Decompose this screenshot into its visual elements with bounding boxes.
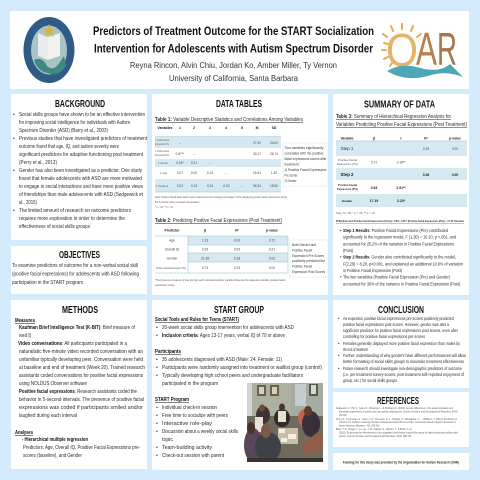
- table 1: correlations: 3: [209, 126, 211, 130]
- table 2: regression: 1.13: [202, 238, 208, 242]
- text block: participants: participated in the program: [162, 381, 218, 387]
- table 1: correlations: 0.62*: [176, 161, 184, 165]
- text block: background bullets: Gender has also been investigated as a predictor. One study: [19, 168, 142, 174]
- text block: conclusion bullets: •: [338, 353, 340, 358]
- callout: table 2: positively predicted the: [292, 259, 325, 263]
- table 2: regression: Positive Facial Expression (Pre): [156, 267, 186, 270]
- table 3: regression summary: Variable: [340, 136, 354, 140]
- text block: participants: Participants: [155, 349, 181, 355]
- callout: table 1: facial expressions scores after: [284, 157, 327, 161]
- text block: step results: F(2,29) = 8.20, p<0.001, and explained an additional 10.9% of variation: [343, 261, 464, 266]
- table 3: regression summary: 0.00: [452, 147, 458, 151]
- text block: background bullets: •: [13, 136, 15, 142]
- text block: start program: Team-building activity: [162, 445, 212, 451]
- text block: conclusion bullets: [338, 316, 467, 383]
- text block: measures: Measures: [15, 318, 35, 324]
- text block: references: Autism Spectrum Disorders, 7(5), 592-603.: [339, 424, 380, 428]
- table 3: regression summary: 0.63: [371, 186, 377, 190]
- text block: program description: [155, 317, 294, 339]
- text block: background bullets: Previous studies that have investigated predictors of treatment: [19, 136, 147, 142]
- text block: conclusion bullets: better formatting of social skills groups to maximize treatment effectiveness: [343, 359, 464, 364]
- panel: conclusion: [333, 300, 469, 388]
- text block: references: 1297-1306.: [339, 414, 347, 417]
- panel: funding: [333, 453, 469, 470]
- text block: participants: [155, 349, 322, 387]
- table 1: correlations: 0.24: [207, 184, 213, 188]
- text block: step results: The two variables (Positive Facial Expression (Pre) and Gender): [343, 275, 451, 280]
- text block: measures: naturalistic five-minute video recorded conversation with an: [19, 349, 143, 355]
- text block: references: [336, 407, 459, 438]
- icon: OAR logo: R: [437, 23, 457, 75]
- panel: objectives: [11, 246, 147, 294]
- text block: background bullets: Social skills groups have shown to be an effective intervention: [19, 112, 145, 118]
- callout: table 2: Expression Post Scores: [292, 270, 325, 274]
- icon: OAR logo: O: [386, 24, 418, 76]
- text block: step results: accounted for 25.2% of the variation in Positive Facial Expressions: [343, 241, 454, 246]
- callout: table 2: Both Gender and: [292, 243, 316, 247]
- text block: references: friendship experiences of autistic and non-autistic adolescents. Journal of Autism and Developmental Disorders, 46(4),: [339, 410, 458, 414]
- table 3: regression summary: Expression (Pre): [337, 187, 358, 191]
- text block: conclusion bullets: •: [338, 341, 340, 346]
- table 1: correlations: --: [225, 171, 227, 175]
- table 1: correlations: 27.30: [253, 141, 261, 145]
- table 3: regression summary: 0.00: [452, 173, 458, 177]
- text block: analyses: Predictors: Age, Overall IQ, Positive Facial Expressions pre-: [23, 445, 140, 451]
- text block: step results: Step 1 Results: Positive Facial Expressions (Pre) contributed: [343, 228, 449, 233]
- table 1: correlations: SD: [272, 126, 277, 130]
- table 1: correlations: 1.30: [271, 171, 277, 175]
- text block: conclusion bullets: the end of treatment: [343, 347, 369, 352]
- text block: participants: •: [156, 373, 158, 379]
- authors: Reyna Rincon, Alvin Chiu, Jordan Ko, Amber Miller, Ty Vernon: [130, 61, 337, 70]
- callout: table 1: treatment:: [284, 162, 300, 166]
- text block: background bullets: al., 2015): [19, 200, 37, 206]
- text block: conclusion bullets: •: [338, 366, 340, 371]
- text block: references: outcome for children receiving intensive behavioral intervention in a large, community-based program. Research in: [339, 421, 457, 424]
- table 2: regression: 0.00: [234, 238, 240, 242]
- callout: table 2: [290, 240, 328, 277]
- text block: conclusion bullets: controlling for positive facial expressions pre scores: [343, 334, 425, 339]
- panel: summary of data: [333, 94, 469, 295]
- table 2: regression: p-value: [266, 228, 278, 232]
- text block: analyses: - Hierarchical multiple regression: [22, 437, 88, 443]
- text block: background bullets: •: [13, 168, 15, 174]
- text block: measures: at baseline and end of treatment (Week 20). Trained research: [19, 365, 145, 371]
- table 1: correlations: 1. Positive Facial: [155, 139, 169, 142]
- heading: objectives: OBJECTIVES: [59, 250, 100, 261]
- heading: methods: METHODS: [62, 305, 98, 316]
- table 1: correlations: 0.00: [191, 171, 197, 175]
- heading: start group: START GROUP: [214, 305, 264, 316]
- text block: participants: •: [156, 365, 158, 371]
- table 3: regression summary: t: [400, 136, 402, 140]
- panel: data tables: [152, 94, 328, 295]
- text block: conclusion bullets: Females generally displayed more positive facial expression than males by: [343, 341, 461, 346]
- text block: measures: expressions was coded if participants smiled and/or: [19, 405, 143, 411]
- table 2 title: Table 2: Predicting Positive Facial Expressions (Post Treatment): [155, 218, 282, 224]
- callout: table 1: 1) Positive Facial Expressions: [284, 168, 327, 172]
- table 1: correlations: 5. Overall IQ: [156, 185, 168, 188]
- text block: measures: unfamiliar typically developing peer. Conversation were held: [19, 357, 143, 363]
- table 3: regression summary: Gender: [342, 199, 353, 203]
- table 3: regression summary: Step 1: [341, 146, 354, 151]
- text block: step results: •: [340, 255, 342, 260]
- text block: start program: Discussion about a weekly social skills: [162, 429, 238, 435]
- table 2: regression: [155, 228, 288, 273]
- text block: analyses: scores (baseline), and Gender: [23, 453, 82, 459]
- text block: measures: Kaufman Brief Intelligence Test (K-BIT): Brief measure of: [19, 325, 135, 331]
- icon: OAR logo: [382, 23, 463, 78]
- table 1: correlations: [155, 126, 281, 192]
- text block: start program: topic: [162, 437, 173, 443]
- text block: analyses: [15, 430, 140, 459]
- text block: background bullets: found that female adolescents with ASD are more motivated: [19, 176, 142, 182]
- text block: measures: Video conversations: All participants participated in a: [18, 341, 127, 347]
- table 1: correlations: --: [193, 152, 195, 156]
- text block: participants: Participants were randomly assigned into treatment or waitlist group (control): [162, 365, 322, 371]
- text block: start program: Free time to socialize with peers: [162, 413, 228, 419]
- table 1: correlations: --: [209, 161, 211, 165]
- text block: program description: 20-week social skills group intervention for adolescents with ASD: [162, 325, 294, 331]
- text block: start program: [155, 397, 238, 459]
- panel: methods: [11, 300, 147, 469]
- heading: background: BACKGROUND: [55, 99, 105, 110]
- panel: references: [333, 392, 469, 447]
- heading: references: REFERENCES: [377, 396, 419, 407]
- text block: background bullets: (Perry et al., 2013): [19, 160, 57, 166]
- table 2: regression: 0.18: [234, 256, 240, 260]
- text block: background bullets: Spectrum Disorder (ASD) (Barry et al., 2003): [19, 128, 108, 134]
- text block: step results: [340, 228, 464, 286]
- text block: references: Barry, T. D., Klinger, L. G., Lee, J. M., Palardy, N., Gilmore, T., & Bodin, S. D.: [336, 428, 412, 431]
- table 1: correlations: 0.87**: [176, 152, 185, 156]
- text block: measures: [15, 318, 145, 419]
- table 3: regression summary: [336, 136, 467, 207]
- panel: background: [11, 94, 147, 240]
- callout: table 1: Pre Scores: [284, 174, 298, 178]
- table 2 note: *The β-beta is a measure of how strongly each individual predictor variable influences the dependent variable (positive facial: [155, 279, 285, 282]
- callout: table 1: [283, 143, 328, 186]
- icon: OAR logo: A: [416, 23, 437, 75]
- table 1: correlations: M: [256, 126, 259, 130]
- text block: step results: in Positive Facial Expression (Post): [343, 268, 403, 273]
- text block: references: Perry, A., Cummings, A., Geier, J. D., Freeman, N. L., Hughes, S., Managhan, T., ... Williams, J. (2013). Predictors of: [336, 418, 457, 421]
- table 3: regression summary: 0.25: [423, 147, 429, 151]
- text block: background bullets: effectiveness of social skills groups: [19, 224, 90, 230]
- panel: start group: [152, 300, 328, 470]
- table 2: regression: 0.23: [234, 266, 240, 270]
- text block: step results: significantly to the regression model, F (1,30) = 10.10, p <.001, and: [343, 235, 457, 240]
- table 3: regression summary: 2.23*: [397, 199, 406, 203]
- text block: conclusion bullets: group, etc.) for social skills groups: [343, 378, 397, 383]
- text block: program description: •: [156, 325, 158, 331]
- header banner: [10, 11, 469, 89]
- text block: start program: •: [156, 413, 158, 419]
- text block: step results: •: [340, 228, 342, 233]
- heading: conclusion: CONCLUSION: [378, 305, 424, 316]
- table 2: regression: 0.72: [269, 238, 275, 242]
- table 1: correlations: 0.22: [177, 184, 183, 188]
- table 1: correlations: 2: [193, 126, 195, 130]
- text block: start program: •: [156, 453, 158, 459]
- table 1: correlations: 15.51: [253, 171, 261, 175]
- text block: conclusion bullets: (i.e. pre treatment survey scores, post treatment self-reported enjoyment of: [343, 372, 465, 377]
- table 2: regression: 0.73: [202, 266, 208, 270]
- table 1: correlations: 2. Positive Facial: [155, 150, 169, 153]
- text block: conclusion bullets: significant predictor for positive facial expressions post scores, even after: [343, 328, 459, 333]
- table 2: regression: 0.00: [234, 248, 240, 252]
- affiliation: University of California, Santa Barbara: [169, 74, 299, 83]
- table 1: correlations: 0.13: [191, 184, 197, 188]
- table 1: correlations: -0.03: [222, 184, 230, 188]
- text block: conclusion bullets: positive facial expressions post scores. However, gender was also a: [343, 322, 450, 327]
- text block: participants: •: [156, 357, 158, 363]
- table 3 title: Table 3: Summary of Hierarchical Regression Analysis for: [336, 114, 451, 120]
- text block: objectives: To examine predictors of outcome for a non-verbal social skill: [12, 263, 138, 269]
- callout: table 1: correlated with the positive: [284, 152, 324, 156]
- text block: start program: START Program: [155, 397, 189, 403]
- text block: start program: Individual check-in session: [162, 405, 217, 411]
- table 2: regression: R²: [235, 228, 240, 232]
- text block: start program: •: [156, 445, 158, 451]
- callout: table 2: Positive Facial: [292, 248, 312, 252]
- table 1: correlations: 24.02: [270, 141, 278, 145]
- table 3: regression summary: Positive Facial: [338, 183, 357, 187]
- text block: background bullets: •: [13, 112, 15, 118]
- text block: start program: •: [156, 429, 158, 435]
- table 2: regression: Age: [169, 238, 175, 242]
- table 1: correlations: 96.34: [253, 184, 261, 188]
- text block: conclusion bullets: As expected, positive facial expressions pre scores positively predicted: [343, 316, 455, 321]
- text block: program description: •: [156, 333, 158, 339]
- text block: objectives: participation in the START program: [12, 280, 83, 286]
- table 2: regression: β: [204, 228, 206, 232]
- table 3: regression summary: 3.18**: [397, 160, 406, 164]
- text block: background bullets: [13, 112, 147, 230]
- text block: background bullets: The limited amount of research on outcome predictors: [19, 208, 131, 214]
- text block: participants: 35 adolescents diagnosed with ASD (Male: 24, Female: 11): [162, 357, 282, 363]
- text block: measures: behavior in 5-second intervals. The presence of positive facial: [19, 397, 144, 403]
- table 1 title: Table 1: Variable Descriptive Statistics and Correlations Among Variables: [155, 117, 303, 123]
- text block: start program: •: [156, 421, 158, 427]
- text block: measures: using NOLDUS Observer software: [19, 381, 87, 387]
- table 3: regression summary: 0.36: [423, 173, 429, 177]
- callout: table 1: Two variables significantly: [284, 146, 324, 150]
- text block: start program: Interactive role-play: [162, 421, 212, 427]
- text block: step results: (Post): [343, 248, 354, 253]
- table 2: regression: 0.21: [269, 248, 275, 252]
- table 3: regression summary: 0.72: [371, 160, 377, 164]
- table 1 note: the 5-minute video recorded conversation.: [155, 201, 200, 204]
- table 2: regression: 0.02: [269, 256, 275, 260]
- table 3: regression summary: 2.91**: [396, 186, 406, 190]
- heading: data tables: DATA TABLES: [216, 99, 262, 110]
- text block: start program: •: [156, 405, 158, 411]
- text block: references: (2003). Examining the effectiveness of an outpatient clinic-based social skills group for high-functioning children with: [339, 432, 459, 434]
- table 3: regression summary: Step 2: [341, 172, 354, 177]
- table 1 note: [155, 196, 288, 209]
- table 1: correlations: --: [179, 141, 181, 145]
- text block: step results: •: [340, 275, 342, 280]
- text block: measures: assistants coded conversations for positive facial expressions: [19, 373, 143, 379]
- text block: background bullets: of friendships than male adolescents with ASD (Sedgewick et: [19, 192, 143, 198]
- table 3: regression summary: β: [373, 136, 375, 140]
- table 3: regression summary: R²: [424, 136, 429, 140]
- table 2: regression: 0.00: [269, 266, 275, 270]
- table 1: correlations: 4: [225, 126, 227, 130]
- table 1: correlations: Variables: [158, 126, 173, 130]
- text block: program description: Social Tools and Rules for Teens (START): [155, 317, 239, 323]
- text block: objectives: (positive facial expressions) for adolescents with ASD following: [12, 272, 139, 278]
- table 3: regression summary: p-value: [449, 136, 461, 140]
- text block: analyses: Analyses: [15, 430, 33, 436]
- callout: table 1: 2) Gender: [284, 179, 297, 183]
- table 3: regression summary: Positive Facial: [338, 159, 358, 162]
- table 1 note: Note: Positive Facial Expressions were measured as the average percentage of time displaying positive facial expressions during: [155, 196, 288, 199]
- table 2 note: [155, 279, 285, 287]
- table 3 title: [336, 114, 467, 128]
- icon: university seal: [24, 17, 74, 83]
- table 1: correlations: 30.17: [253, 152, 261, 156]
- table 3 note: Note. N = 35. * p < .05. ** p < .01: [336, 212, 376, 215]
- text block: measures: overall IQ: [19, 333, 31, 339]
- callout: table 2: Positive Facial: [292, 264, 312, 268]
- title: Predictors of Treatment Outcome for the START Socialization: [93, 26, 374, 38]
- text block: program description: Inclusion criteria: Ages 13-17 years, verbal IQ of 70 or above: [162, 333, 285, 339]
- text block: background bullets: significant predictors for adaptive functioning post treatment: [19, 152, 144, 158]
- table 2 note: expression score).: [155, 284, 175, 287]
- text block: participants: Typically developing high school peers and undergraduate facilitators: [162, 373, 303, 379]
- table 3: regression summary: 17.19: [370, 199, 378, 203]
- text block: conclusion bullets: •: [338, 316, 340, 321]
- table 1: correlations: Expressions Pre: [155, 143, 169, 146]
- table 1: correlations: --: [241, 184, 243, 188]
- table 1: correlations: 1: [179, 126, 181, 130]
- table 1: correlations: 0.10: [207, 171, 213, 175]
- table 2: regression: 0.29: [202, 248, 208, 252]
- text block: background bullets: outcome found that age, IQ, and autism severity were: [19, 144, 119, 150]
- text block: measures: laughed during each interval: [19, 413, 77, 419]
- text block: step results: Step 2 Results: Gender also contributed significantly to the model,: [343, 255, 456, 260]
- photo: group session: [244, 383, 323, 462]
- text block: background bullets: to engage in social interactions and have more positive views: [19, 184, 143, 190]
- title: Intervention for Adolescents with Autism Spectrum Disorder: [94, 44, 373, 56]
- table 2: regression: 21.38: [201, 256, 209, 260]
- table 2: regression: Predictor: [165, 228, 180, 232]
- table 1: correlations: 4. Age: [160, 172, 168, 175]
- table 1: correlations: 0.21: [191, 161, 197, 165]
- text block: references: Sedgewick, F., Hill, V., Yates, R., Pickering, L., & Pellicano, E. (2016). Gender differences in the social motivation and: [336, 407, 454, 410]
- title: [93, 26, 374, 56]
- heading: summary of data: SUMMARY OF DATA: [364, 100, 435, 110]
- text block: references: autism. Journal of Autism and Developmental Disorders, 33(6), 685-701.: [339, 435, 412, 438]
- table 1: correlations: 18.50: [270, 184, 278, 188]
- callout: table 2: Expression Pre Scores: [292, 254, 324, 258]
- table 2: regression: Overall IQ: [165, 248, 180, 252]
- text block: background bullets: •: [13, 208, 15, 214]
- table 1: correlations: 0.07: [177, 171, 183, 175]
- table 1 note: * p < .05, ** p < .01: [155, 206, 174, 209]
- table 1: correlations: 5: [241, 126, 243, 130]
- text block: start program: Check-out session with parent: [162, 453, 224, 459]
- text block: step results: accounted for 36% of the variance in Positive Facial Expression (Post): [343, 281, 461, 286]
- text block: background bullets: requires more exploration in order to determine the: [19, 216, 125, 222]
- text block: conclusion bullets: Future research should investigate non-demographic predictors of outcome: [343, 366, 463, 371]
- table 1: correlations: 26.74: [270, 152, 278, 156]
- table 3: regression summary: Expressions (Pre): [337, 163, 358, 166]
- text block: objectives: [12, 263, 139, 286]
- table 1: correlations: Expressions Post: [155, 154, 169, 157]
- table 2: regression: Gender: [167, 256, 178, 260]
- table 1: correlations: 3. Gender: [158, 162, 168, 165]
- text block: background bullets: for improving social intelligence for individuals with Autism: [19, 120, 130, 126]
- text block: measures: Positive facial expressions: Research assistants coded the: [19, 389, 137, 395]
